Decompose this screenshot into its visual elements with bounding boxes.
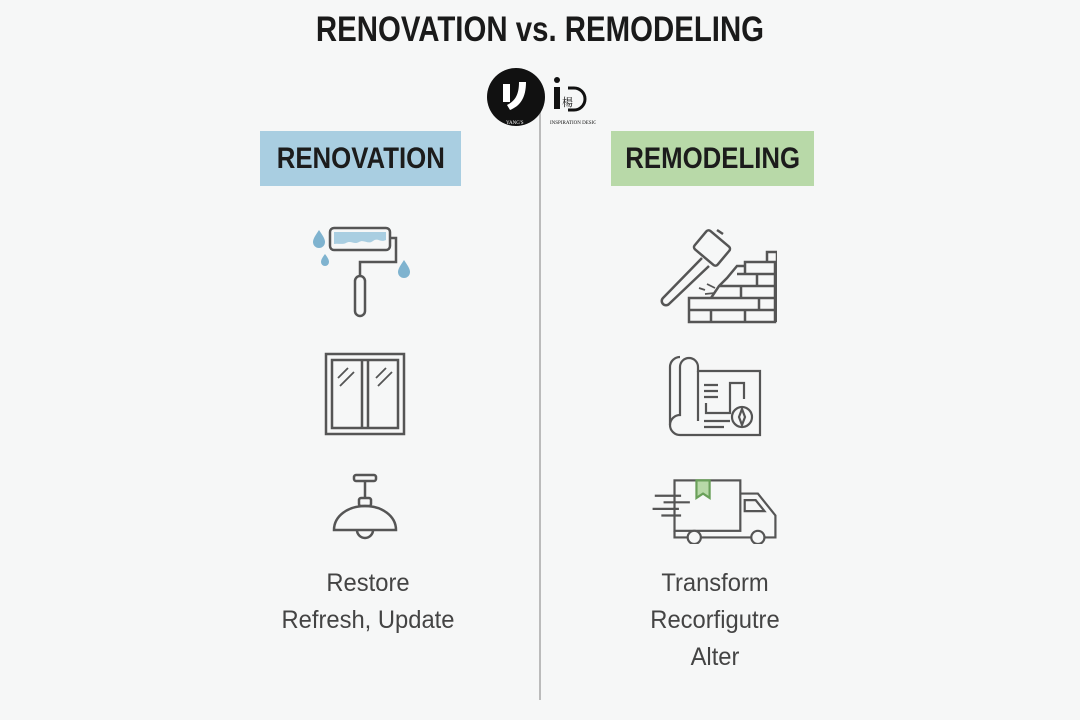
heading: remodeling: REMODELING [625,142,800,175]
text: renovation keywords: Refresh, Update [282,606,454,634]
heading: renovation: RENOVATION [276,142,445,175]
text: remodeling keywords: Alter [691,643,739,671]
icon: window [324,352,406,436]
logo: YANG'S [506,121,524,126]
logo [487,68,596,126]
logo: 楊 [562,94,573,110]
text: renovation keywords: Restore [326,569,410,597]
heading: remodeling [611,131,814,186]
text: remodeling keywords: Transform [661,569,769,597]
icon: paint roller [313,226,410,318]
icon: delivery truck [652,479,776,544]
text: remodeling keywords [650,569,780,671]
icon: pendant lamp [332,474,398,540]
text: renovation keywords [282,569,454,634]
icon: hammer and brick wall [660,229,777,324]
divider line [539,100,541,700]
heading: renovation [260,131,461,186]
text: remodeling keywords: Recorfigutre [650,606,780,634]
icon: blueprint [668,356,762,436]
title: RENOVATION vs. REMODELING [316,10,764,49]
